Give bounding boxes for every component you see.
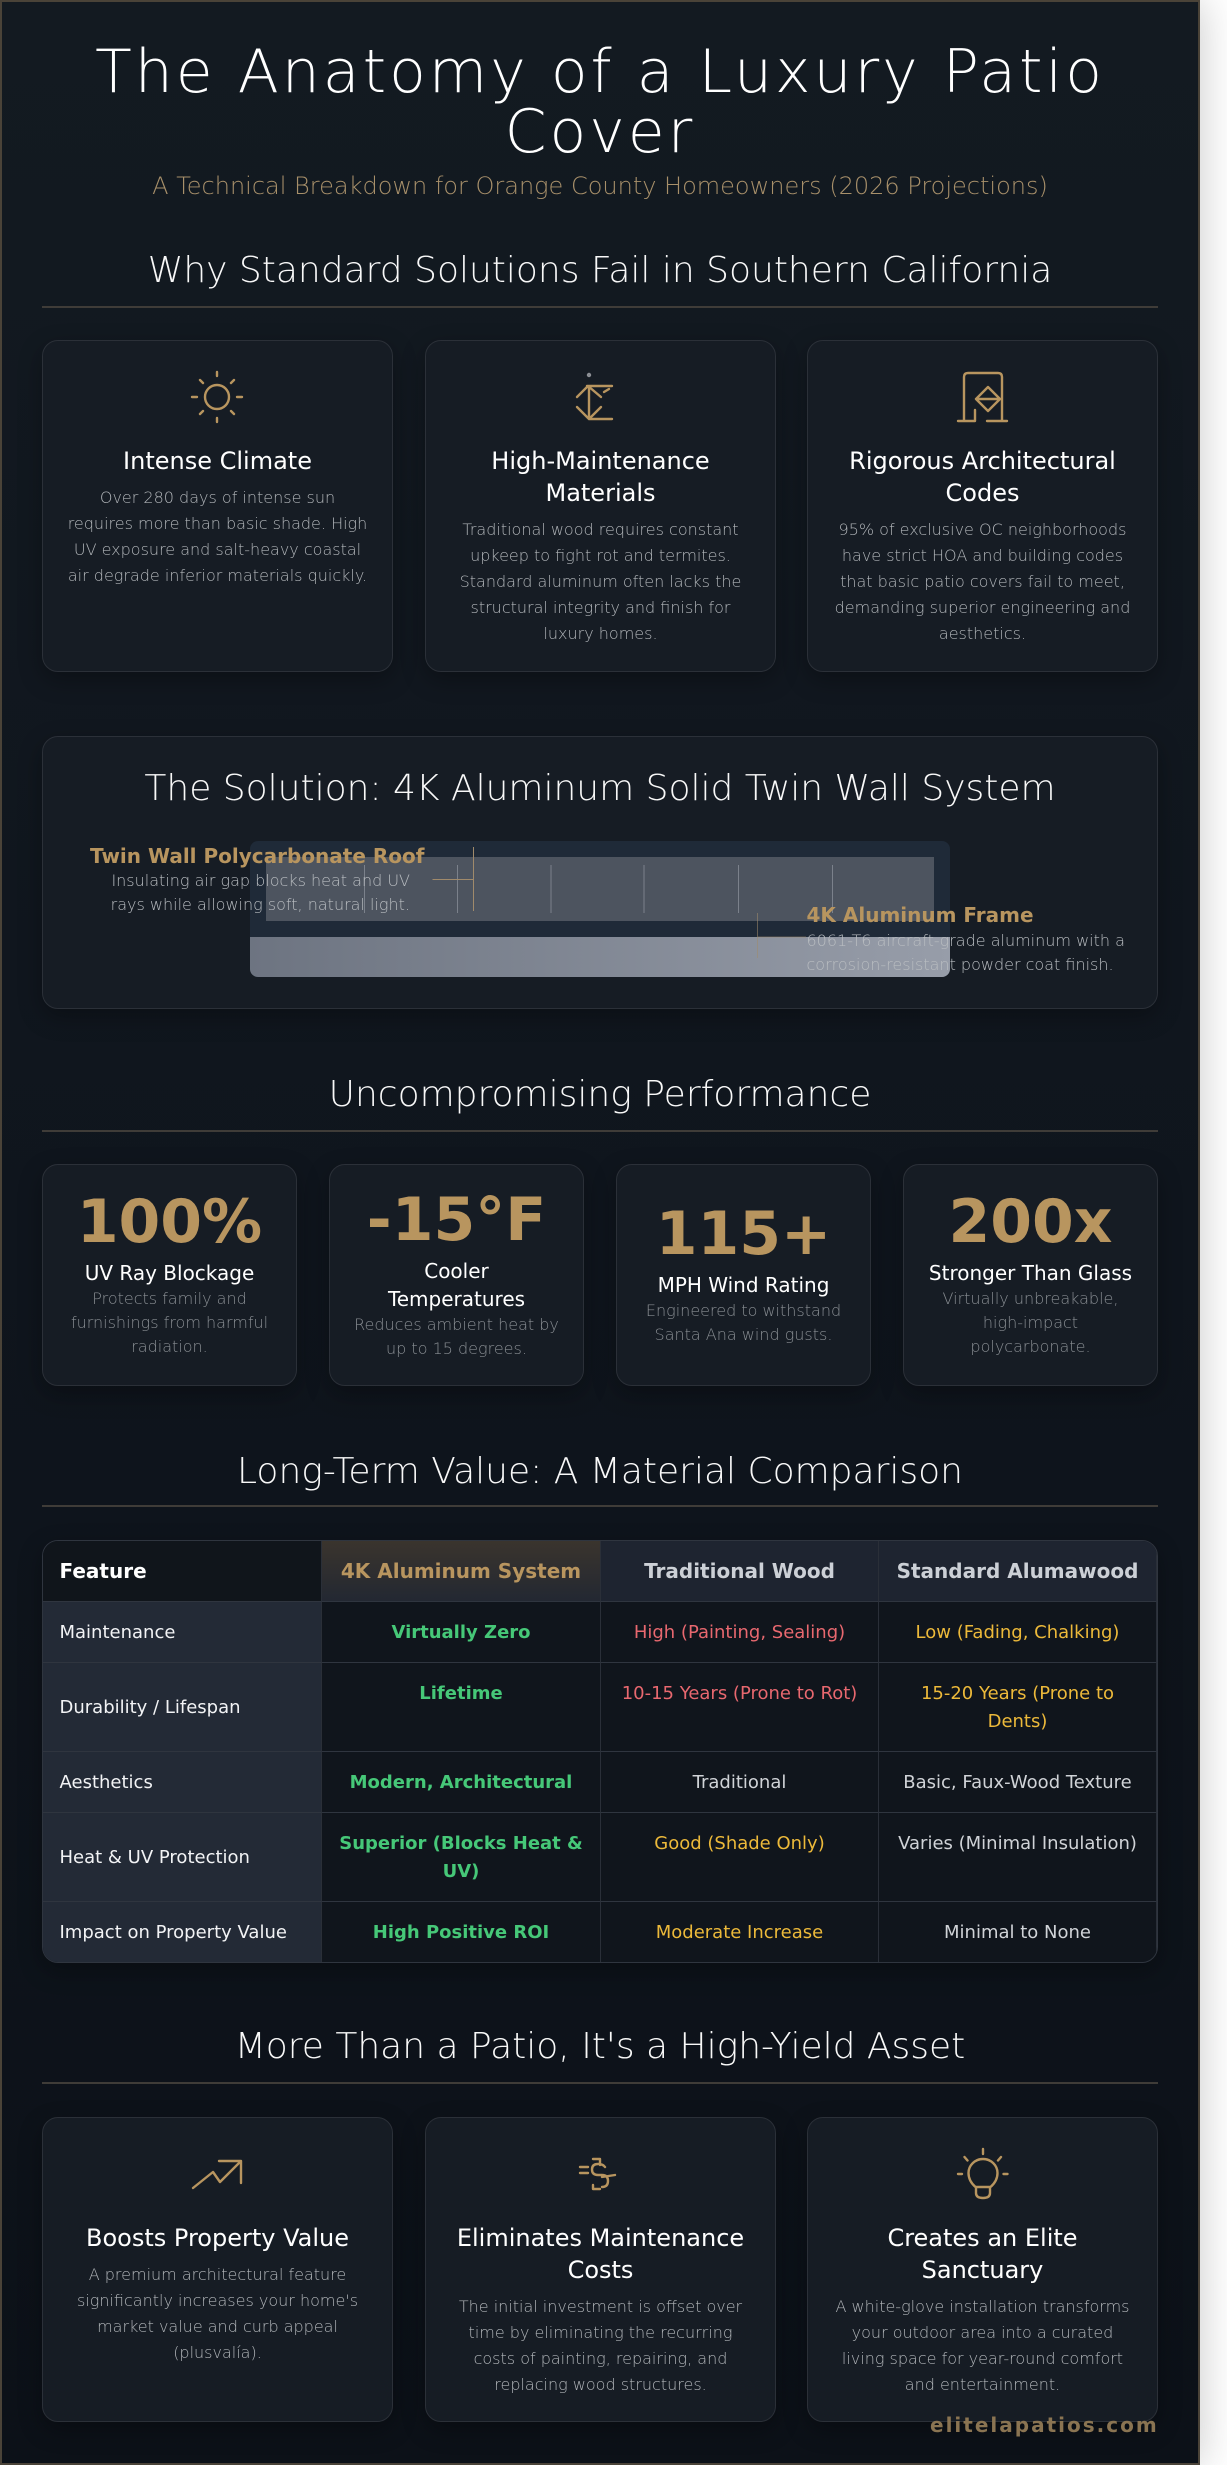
text: high-maintenance materials: structural integrity and finish for	[470, 598, 731, 617]
stat text: strength: high-impact	[983, 1312, 1078, 1332]
comparison table: Good (Shade Only)	[654, 1833, 825, 1854]
comparison table: Moderate Increase	[656, 1922, 823, 1943]
icon: growth chart	[192, 2160, 242, 2190]
comparison table: Virtually Zero	[391, 1622, 531, 1643]
text: property value	[77, 2265, 358, 2362]
stat text: strength	[943, 1288, 1118, 1356]
icon: dollar	[578, 2158, 616, 2190]
comparison table: Maintenance	[60, 1622, 175, 1642]
text: maintenance costs: The initial investment is offset over	[459, 2297, 742, 2316]
text: rigorous architectural codes: aesthetics.	[939, 624, 1026, 643]
panel: elite sanctuary	[807, 2117, 1158, 2422]
stat card: temperature	[329, 1164, 584, 1386]
stat card: strength	[903, 1164, 1158, 1386]
stat text: UV: Protects family and	[92, 1288, 247, 1308]
text: twin wall roof	[111, 871, 410, 914]
heading: high-maintenance materials	[491, 446, 710, 507]
stat: 100%: 100%	[77, 1187, 262, 1257]
text: high-maintenance materials	[460, 520, 741, 643]
text: maintenance costs	[459, 2297, 742, 2394]
heading: rigorous architectural codes: Codes	[946, 479, 1019, 507]
heading: high-yield asset: More Than a Patio, It's a High-Yield Asset	[235, 2026, 965, 2067]
roof panel	[266, 857, 934, 921]
comparison table: 10-15 Years (Prone to Rot)	[622, 1683, 857, 1704]
roof channel lines	[364, 865, 833, 913]
text: rigorous architectural codes: have strict HOA and building codes	[842, 546, 1123, 565]
text: high-maintenance materials: upkeep to fight rot and termites.	[470, 546, 731, 565]
comparison table: High Positive ROI	[373, 1922, 549, 1943]
comparison table: Aesthetics	[60, 1772, 153, 1792]
comparison table: Varies (Minimal Insulation)	[898, 1833, 1137, 1854]
stat: 200x: 200x	[949, 1187, 1112, 1257]
heading: rigorous architectural codes	[849, 446, 1116, 507]
heading: rigorous architectural codes: Rigorous Architectural	[849, 446, 1116, 474]
panel: property value	[42, 2117, 393, 2422]
stat text: wind: Engineered to withstand	[646, 1300, 841, 1320]
text: maintenance costs: replacing wood structures.	[494, 2375, 707, 2394]
stat: -15F: -15°F	[367, 1185, 546, 1255]
heading: comparison: Long-Term Value: A Material Comparison	[237, 1450, 963, 1492]
text: rigorous architectural codes: demanding superior engineering and	[835, 598, 1130, 617]
text: rigorous architectural codes: that basic patio covers fail to meet,	[840, 572, 1125, 591]
text: aluminum frame	[806, 931, 1125, 974]
label: twin wall roof: Twin Wall Polycarbonate Roof	[90, 844, 424, 868]
panel: rigorous architectural codes	[807, 340, 1158, 672]
stat text: wind	[646, 1300, 841, 1344]
heading: maintenance costs	[457, 2224, 744, 2284]
text: intense climate: UV exposure and salt-heavy coastal	[74, 540, 361, 559]
stat text: temperature	[354, 1314, 559, 1358]
comparison table	[42, 1540, 1158, 1963]
text: intense climate: requires more than basic shade. High	[68, 514, 367, 533]
stat label: UV: UV Ray Blockage	[85, 1261, 254, 1285]
text: property value: market value and curb appeal	[97, 2317, 338, 2336]
text: intense climate	[68, 488, 367, 585]
comparison table: Durability / Lifespan	[60, 1696, 241, 1718]
text: aluminum frame: corrosion-resistant powder coat finish.	[806, 955, 1114, 974]
comparison table: Minimal to None	[944, 1922, 1091, 1943]
comparison table: Heat & UV Protection	[60, 1846, 250, 1868]
label: aluminum frame: 4K Aluminum Frame	[806, 903, 1034, 927]
comparison table: Standard Alumawood	[897, 1559, 1138, 1583]
comparison table: Impact on Property Value	[60, 1922, 287, 1942]
stat card: UV	[42, 1164, 297, 1386]
stat label: temperature: Temperatures	[388, 1287, 525, 1311]
stat text: UV: radiation.	[131, 1336, 208, 1356]
text: elite sanctuary	[835, 2297, 1130, 2394]
comparison table: Lifetime	[419, 1683, 503, 1704]
comparison table: Superior (Blocks Heat &	[339, 1833, 583, 1854]
callout line: roof	[432, 847, 474, 911]
text: maintenance costs: costs of painting, repairing, and	[474, 2349, 727, 2368]
heading: elite sanctuary	[887, 2224, 1078, 2284]
callout line: frame	[592, 913, 1002, 2177]
stat text: strength: polycarbonate.	[970, 1336, 1091, 1356]
text: intense climate: Over 280 days of intense sun	[100, 488, 335, 507]
watermark: elitelapatios.com	[930, 2413, 1159, 2437]
heading: why standard solutions fail: Why Standard Solutions Fail in Southern California	[148, 250, 1052, 291]
heading: high-maintenance materials: High-Maintenance	[491, 446, 710, 474]
heading: intense climate: Intense Climate	[123, 446, 312, 474]
comparison table: Modern, Architectural	[350, 1772, 572, 1793]
comparison table: 15-20 Years (Prone to	[921, 1683, 1114, 1704]
stat card: wind	[616, 1164, 871, 1386]
stat text: wind: Santa Ana wind gusts.	[655, 1324, 832, 1344]
icon: maintenance	[576, 372, 614, 420]
text: rigorous architectural codes	[835, 520, 1130, 643]
comparison table: High (Painting, Sealing)	[634, 1622, 845, 1643]
text: aluminum frame: 6061-T6 aircraft-grade aluminum with a	[806, 931, 1125, 950]
panel: intense climate	[42, 340, 393, 672]
text: elite sanctuary: A white-glove installation transforms	[835, 2297, 1130, 2316]
comparison table: UV)	[443, 1861, 479, 1882]
aluminum frame bar	[250, 937, 950, 977]
text: twin wall roof: Insulating air gap blocks heat and UV	[111, 871, 410, 890]
subtitle: A Technical Breakdown for Orange County Homeowners (2026 Projections)	[152, 172, 1048, 200]
stat text: temperature: Reduces ambient heat by	[354, 1314, 559, 1334]
text: twin wall roof: rays while allowing soft, natural light.	[111, 895, 410, 914]
heading: maintenance costs: Costs	[568, 2256, 633, 2284]
text: property value: significantly increases your home's	[77, 2291, 358, 2310]
text: maintenance costs: time by eliminating the recurring	[469, 2323, 732, 2342]
comparison table: Traditional Wood	[644, 1559, 835, 1583]
icon: codes	[956, 372, 1008, 422]
stat text: temperature: up to 15 degrees.	[386, 1338, 527, 1358]
text: high-maintenance materials: Standard aluminum often lacks the	[460, 572, 741, 591]
comparison table: Low (Fading, Chalking)	[916, 1622, 1119, 1643]
heading: high-maintenance materials: Materials	[545, 479, 656, 507]
text: rigorous architectural codes: 95% of exclusive OC neighborhoods	[839, 520, 1126, 539]
stat label: temperature	[388, 1259, 525, 1311]
heading: elite sanctuary: Creates an Elite	[887, 2224, 1078, 2252]
text: high-maintenance materials: luxury homes.	[543, 624, 658, 643]
stat text: strength: Virtually unbreakable,	[943, 1288, 1118, 1308]
icon: sun	[190, 370, 244, 424]
text: high-maintenance materials: Traditional wood requires constant	[462, 520, 739, 539]
stat: 115+: 115+	[656, 1199, 831, 1269]
comparison table: Basic, Faux-Wood Texture	[903, 1772, 1132, 1793]
text: elite sanctuary: and entertainment.	[905, 2375, 1060, 2394]
stat text: UV: furnishings from harmful	[71, 1312, 268, 1332]
panel: the solution	[42, 736, 1158, 1009]
heading: elite sanctuary: Sanctuary	[922, 2256, 1043, 2284]
stat label: wind: MPH Wind Rating	[658, 1273, 829, 1297]
text: elite sanctuary: your outdoor area into a curated	[852, 2323, 1113, 2342]
text: elite sanctuary: living space for year-round comfort	[842, 2349, 1123, 2368]
stat text: UV	[71, 1288, 268, 1356]
text: property value: A premium architectural feature	[89, 2265, 346, 2284]
panel: high-maintenance materials	[425, 340, 776, 672]
title	[95, 37, 1105, 167]
stat label: temperature: Cooler	[424, 1259, 489, 1283]
comparison table: 4K Aluminum System	[341, 1559, 581, 1583]
stat label: strength: Stronger Than Glass	[929, 1261, 1132, 1285]
comparison table: Traditional	[693, 1772, 786, 1793]
text: property value: (plusvalía).	[173, 2343, 262, 2362]
icon: light bulb	[956, 2148, 1009, 2200]
heading: property value: Boosts Property Value	[86, 2224, 349, 2252]
diagram: patio cover cross-section	[250, 841, 950, 977]
comparison table: Dents)	[988, 1711, 1047, 1732]
panel: maintenance costs	[425, 2117, 776, 2422]
title: The Anatomy of a Luxury Patio	[95, 37, 1105, 107]
heading: maintenance costs: Eliminates Maintenance	[457, 2224, 744, 2252]
comparison table: Feature	[60, 1559, 147, 1583]
text: intense climate: air degrade inferior materials quickly.	[68, 566, 367, 585]
heading: the solution: The Solution: 4K Aluminum Solid Twin Wall System	[144, 768, 1056, 809]
title: Cover	[505, 97, 695, 167]
heading: performance: Uncompromising Performance	[329, 1074, 871, 1115]
